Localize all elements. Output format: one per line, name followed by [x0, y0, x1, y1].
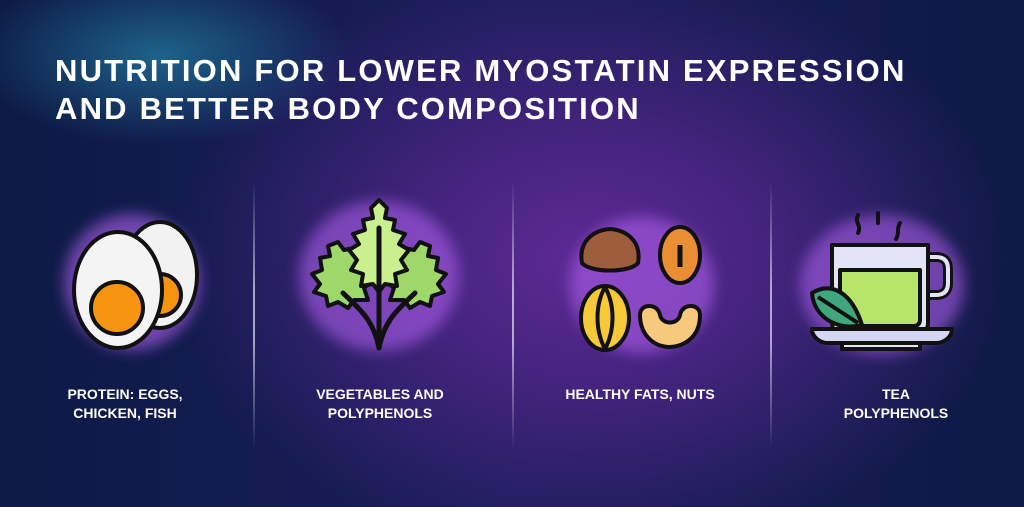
title: [55, 53, 907, 126]
label: protein: PROTEIN: EGGS,: [67, 386, 183, 402]
label: tea: TEA: [882, 386, 910, 402]
icon: eggs: [56, 206, 208, 359]
icon: green tea cup: [792, 207, 972, 363]
label: tea: [844, 386, 948, 421]
label: vegetables: [316, 386, 444, 421]
label: vegetables: POLYPHENOLS: [328, 405, 432, 421]
title: NUTRITION FOR LOWER MYOSTATIN EXPRESSION: [55, 53, 907, 88]
label: fats: HEALTHY FATS, NUTS: [565, 386, 715, 402]
label: protein: CHICKEN, FISH: [73, 405, 177, 421]
label: vegetables: VEGETABLES AND: [316, 386, 444, 402]
label: tea: POLYPHENOLS: [844, 405, 948, 421]
label: protein: [67, 386, 183, 421]
icon: parsley: [291, 194, 466, 358]
title: AND BETTER BODY COMPOSITION: [55, 91, 641, 126]
icon: nuts: [564, 210, 721, 360]
